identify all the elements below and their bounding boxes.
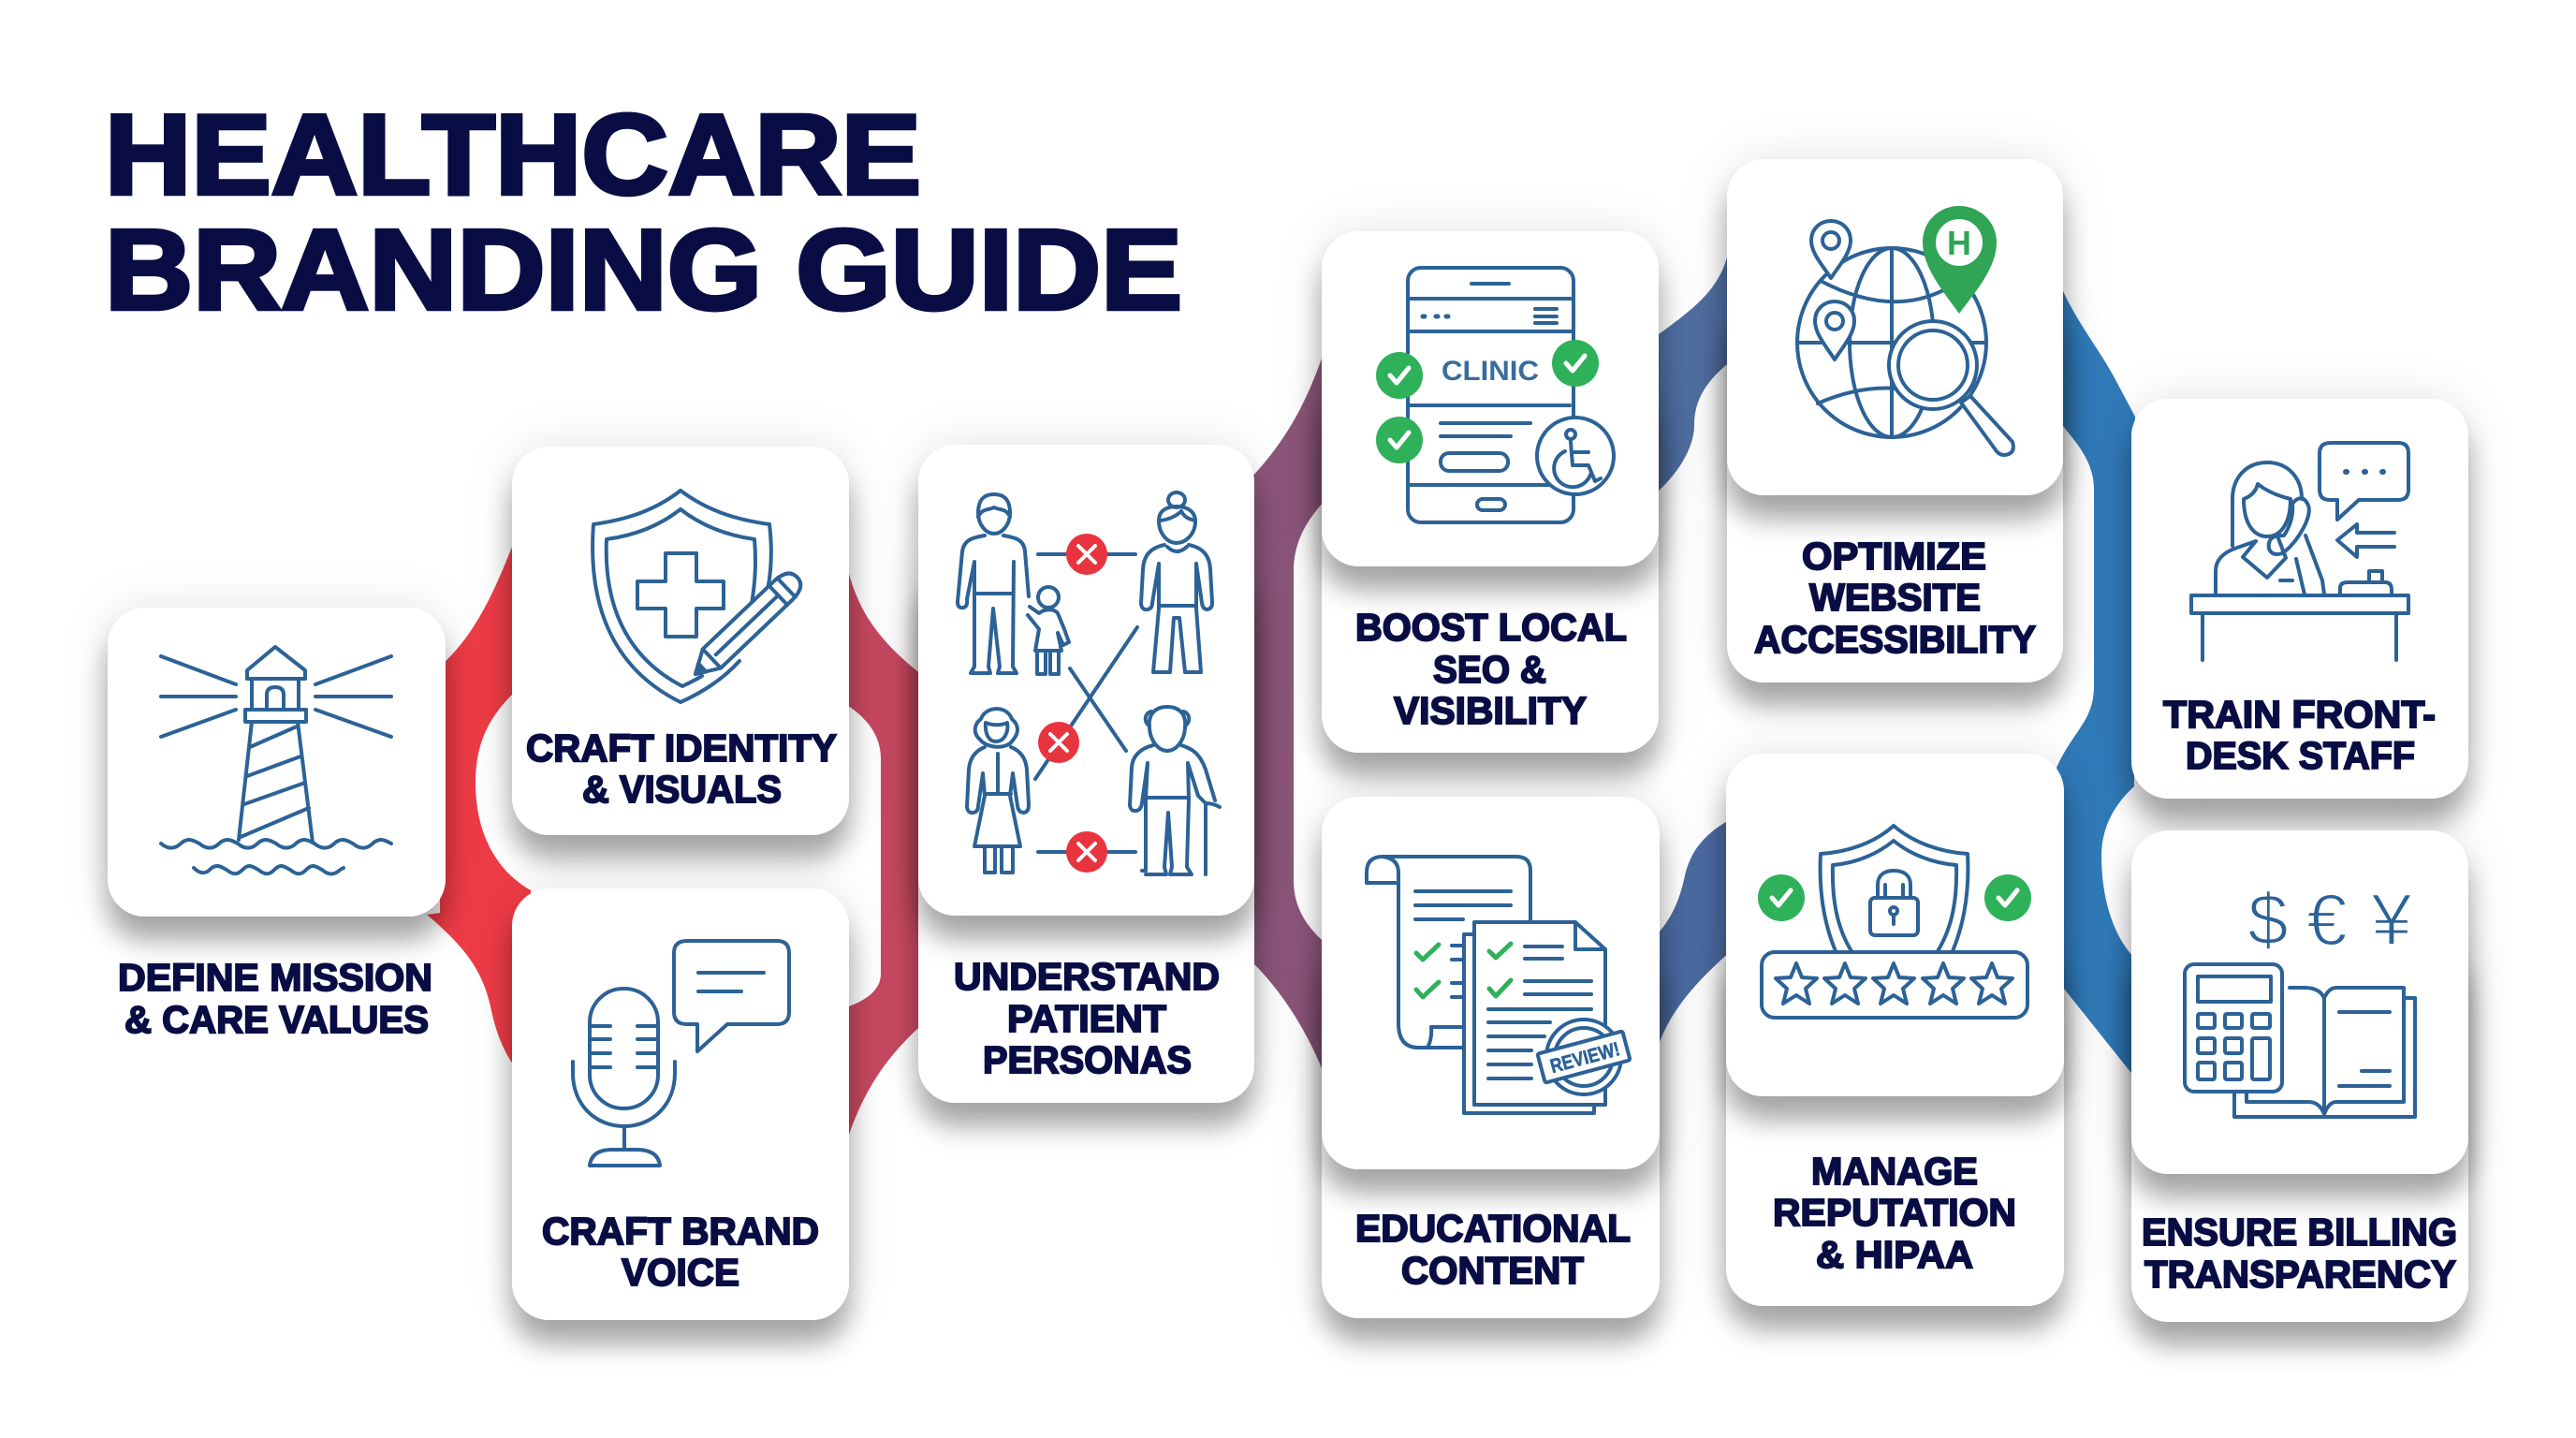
label: TRANSPARENCY bbox=[2144, 1253, 2456, 1296]
connector: red ribbon from mission to identity and voice bbox=[427, 534, 531, 1078]
clinic word: CLINIC bbox=[1442, 356, 1539, 387]
label bbox=[118, 956, 432, 1041]
panel: craft brand voice bbox=[512, 888, 849, 1320]
currency symbols bbox=[2247, 878, 2412, 961]
label bbox=[542, 1210, 819, 1294]
icon: microphone with speech bubble bbox=[573, 941, 789, 1166]
title: HEALTHCARE bbox=[105, 91, 921, 218]
label: & HIPAA bbox=[1816, 1233, 1973, 1276]
panel: boost local seo bbox=[1322, 231, 1659, 753]
panel: define mission bbox=[108, 608, 446, 1041]
card background bbox=[108, 608, 446, 917]
icon: shield, lock and star rating bbox=[1758, 826, 2031, 1018]
card background bbox=[2131, 399, 2468, 799]
label: DESK STAFF bbox=[2186, 734, 2415, 777]
label card background bbox=[1322, 936, 1660, 1318]
icon: red x markers bbox=[1038, 534, 1107, 873]
review stamp word: REVIEW! bbox=[1548, 1038, 1622, 1078]
label bbox=[2163, 693, 2436, 777]
label: MANAGE bbox=[1811, 1150, 1978, 1193]
label bbox=[1355, 1207, 1631, 1292]
panel: craft identity bbox=[512, 447, 849, 835]
connector: purple ribbon to SEO and educational content bbox=[1250, 351, 1329, 1068]
label: PATIENT bbox=[1007, 997, 1166, 1040]
icon: green check marks bbox=[1416, 944, 1511, 997]
image card background bbox=[1322, 797, 1660, 1169]
label card background bbox=[2131, 936, 2468, 1322]
label card background bbox=[1726, 936, 2064, 1306]
label: CONTENT bbox=[1401, 1249, 1584, 1292]
label: OPTIMIZE bbox=[1802, 535, 1986, 578]
icon: globe, map pins and magnifier bbox=[1797, 206, 2013, 455]
label: WEBSITE bbox=[1809, 576, 1981, 619]
label bbox=[1773, 1150, 2016, 1276]
label: & CARE VALUES bbox=[124, 998, 429, 1041]
label bbox=[1754, 535, 2036, 661]
icon: patient personas bbox=[958, 492, 1220, 874]
label: UNDERSTAND bbox=[954, 955, 1220, 998]
label card background bbox=[918, 562, 1254, 1103]
label: REPUTATION bbox=[1773, 1191, 2016, 1234]
icon: green checks bbox=[1376, 340, 1599, 463]
connector: blue ribbon to staff and billing bbox=[2056, 286, 2135, 1077]
label: BOOST LOCAL bbox=[1355, 606, 1627, 649]
label: CRAFT IDENTITY bbox=[526, 726, 837, 770]
panel: manage reputation bbox=[1726, 754, 2064, 1306]
icon: receptionist on the phone at a desk bbox=[2191, 443, 2408, 660]
panel: ensure billing transparency bbox=[2131, 830, 2468, 1322]
label: ENSURE BILLING bbox=[2142, 1211, 2457, 1254]
image card background bbox=[1726, 754, 2064, 1096]
card background bbox=[512, 888, 849, 1320]
label card background bbox=[1727, 300, 2063, 682]
image card background bbox=[2131, 830, 2468, 1174]
icon: shield with cross and pencil bbox=[593, 491, 806, 702]
connector: slate blue ribbon lower bbox=[1652, 816, 1732, 1063]
label bbox=[1355, 606, 1627, 732]
title: BRANDING GUIDE bbox=[105, 206, 1182, 333]
icon: scroll and documents with review stamp bbox=[1367, 857, 1631, 1113]
label: TRAIN FRONT- bbox=[2163, 693, 2436, 736]
panel: educational content bbox=[1322, 797, 1660, 1318]
label: SEO & bbox=[1433, 648, 1546, 691]
icon: lighthouse bbox=[161, 647, 391, 873]
panel: understand personas bbox=[918, 445, 1254, 1103]
label bbox=[2142, 1211, 2457, 1296]
panel: optimize website accessibility bbox=[1727, 159, 2063, 682]
currency symbols: ¥ bbox=[2370, 878, 2412, 961]
hospital H mark: H bbox=[1947, 224, 1971, 262]
currency symbols: $ bbox=[2247, 878, 2289, 961]
title bbox=[105, 91, 1182, 333]
label: PERSONAS bbox=[983, 1038, 1192, 1081]
label bbox=[526, 726, 837, 811]
label: & VISUALS bbox=[582, 768, 782, 811]
icon: phone clinic page with checks bbox=[1408, 268, 1614, 522]
label card background bbox=[1322, 374, 1659, 753]
label: CRAFT BRAND bbox=[542, 1210, 819, 1253]
image card background bbox=[1322, 231, 1659, 566]
label bbox=[954, 955, 1220, 1081]
label: DEFINE MISSION bbox=[118, 956, 432, 999]
currency symbols: € bbox=[2306, 878, 2348, 961]
panel: train front desk staff bbox=[2131, 399, 2468, 799]
connector: crimson ribbon to personas bbox=[842, 562, 927, 1135]
label: ACCESSIBILITY bbox=[1754, 618, 2036, 661]
label: VOICE bbox=[622, 1251, 739, 1294]
connector: slate blue ribbon upper bbox=[1652, 253, 1732, 496]
image card background bbox=[1727, 159, 2063, 495]
label: VISIBILITY bbox=[1394, 689, 1587, 732]
card background bbox=[512, 447, 849, 835]
label: EDUCATIONAL bbox=[1355, 1207, 1631, 1250]
image card background bbox=[918, 445, 1254, 916]
icon: calculator and ledger book bbox=[2185, 964, 2415, 1117]
